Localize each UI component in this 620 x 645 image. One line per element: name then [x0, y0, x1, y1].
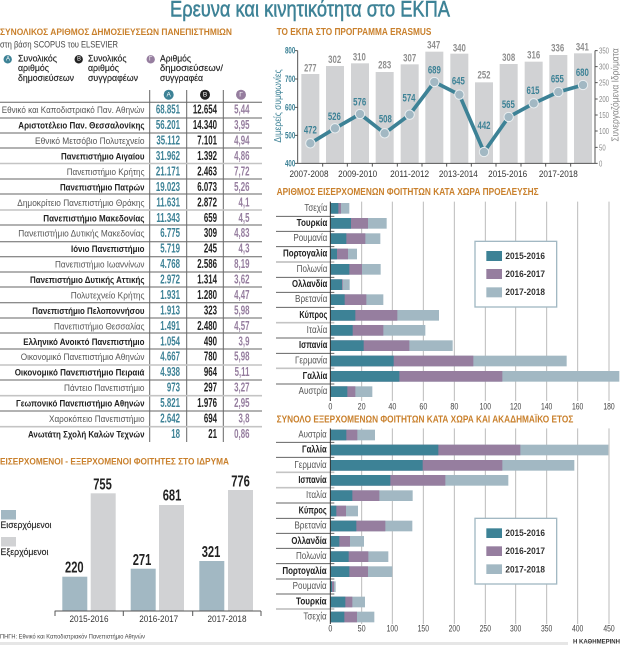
bar values: 321 [202, 543, 221, 561]
right axis labels [599, 46, 609, 168]
country labels: Τουρκία [297, 218, 327, 229]
country labels: Πολωνία [296, 551, 327, 562]
university names: Πάντειο Πανεπιστήμιο [64, 383, 144, 394]
stacked bars [330, 430, 608, 622]
agreements values: 689 [428, 65, 441, 77]
x axis values: 140 [541, 402, 552, 412]
country labels: Γαλλία [303, 371, 327, 382]
bar values: 776 [231, 473, 250, 490]
column C values: 4,47 [234, 289, 250, 303]
agreements line [310, 82, 583, 152]
x axis values: 250 [480, 624, 491, 634]
university names: Χαροκόπειο Πανεπιστήμιο [49, 414, 144, 425]
column B values: 7.101 [197, 135, 217, 148]
university names: Πανεπιστήμιο Πελοποννήσου [32, 306, 145, 317]
column C values: 4,94 [234, 135, 250, 148]
institutions values: 336 [551, 43, 564, 55]
x axis: 2016-2017 [139, 614, 178, 625]
x axis labels: 2009-2010 [338, 169, 377, 179]
country labels: Ρουμανία [293, 581, 327, 592]
footer band [0, 642, 568, 645]
institutions values: 341 [576, 41, 589, 53]
column A values: 35.112 [156, 135, 180, 148]
column A values: 18 [171, 428, 180, 442]
agreements values: 574 [402, 93, 416, 105]
bar values: 681 [163, 487, 182, 504]
column C values: 3,9 [239, 336, 250, 349]
legend: 2015-2016 [505, 528, 545, 538]
university names: Αριστοτέλειο Παν. Θεσσαλονίκης [18, 121, 145, 132]
column B values: 12.654 [193, 104, 217, 117]
country labels: Ισπανία [299, 340, 327, 351]
left axis labels: 600 [285, 102, 295, 112]
x axis labels: 2013-2014 [439, 169, 478, 179]
university names: Πανεπιστήμιο Πατρών [60, 182, 144, 193]
country labels: Τσεχία [303, 611, 327, 622]
heading: ΕΙΣΕΡΧΟΜΕΝΟΙ - ΕΞΕΡΧΟΜΕΝΟΙ ΦΟΙΤΗΤΕΣ ΣΤΟ ΙΔΡΥΜΑ [0, 456, 229, 468]
column B values: 2.872 [197, 197, 217, 210]
institutions values: 347 [427, 40, 440, 52]
column B values: 780 [204, 351, 217, 364]
x axis values: 160 [572, 402, 583, 412]
column B values: 6.073 [197, 181, 217, 194]
x axis values: 80 [450, 402, 458, 412]
heading: ΣΥΝΟΛΟ ΕΞΕΡΧΟΜΕΝΩΝ ΦΟΙΤΗΤΩΝ ΚΑΤΑ ΧΩΡΑ ΚΑΙ ΑΚΑΔΗΜΑΪΚΟ ΕΤΟΣ [277, 414, 573, 425]
country labels: Πορτογαλία [282, 566, 327, 577]
legend: column B: Συνολικός [88, 54, 127, 64]
right axis labels: 100 [599, 126, 609, 136]
legend [0, 510, 52, 558]
legend: 2017-2018 [505, 287, 545, 297]
legend: column A: Συνολικός [18, 54, 57, 64]
university names: Ανωτάτη Σχολή Καλών Τεχνών [28, 430, 144, 440]
agreements values: 526 [328, 111, 341, 123]
panel: Erasmus chart [273, 27, 620, 179]
institutions values: 316 [527, 49, 540, 61]
row separators [276, 216, 334, 384]
column B values: 2.480 [197, 320, 217, 333]
country labels: Βρετανία [294, 520, 327, 531]
column A values: 4.667 [160, 351, 180, 364]
legend: column C [146, 54, 223, 84]
university names: Δημοκρίτειο Πανεπιστήμιο Θράκης [17, 198, 145, 209]
column header badges: Β [203, 92, 207, 98]
table subheading: στη βάση SCOPUS του ELSEVIER [0, 40, 118, 50]
column B values: 490 [204, 336, 217, 349]
column A values: 56.201 [156, 120, 180, 133]
source note: ΠΗΓΗ: Εθνικό και Καποδιστριακόν Πανεπιστήμιο Αθηνών [0, 632, 145, 640]
legend: column B [74, 54, 138, 84]
country labels: Ισπανία [298, 475, 327, 486]
legend: 2016-2017 [505, 546, 545, 556]
agreements values: 508 [379, 113, 392, 125]
heading: ΤΟ ΕΚΠΑ ΣΤΟ ΠΡΟΓΡΑΜΜΑ ERASMUS [277, 27, 432, 38]
column C values: 3,95 [234, 120, 250, 133]
x axis values: 60 [419, 402, 427, 412]
institutions bars [301, 52, 592, 163]
column C values [234, 104, 250, 442]
university names: Πανεπιστήμιο Κρήτης [67, 167, 145, 178]
x axis labels: 2017-2018 [539, 169, 578, 179]
column A values: 973 [167, 382, 180, 395]
legend: column C: Αριθμός [160, 54, 191, 64]
column C values: 5,98 [234, 305, 250, 318]
x axis values: 350 [541, 624, 552, 634]
institutions values: 340 [453, 42, 466, 54]
country labels: Ολλανδία [292, 279, 327, 290]
column header badges: Γ [239, 92, 243, 98]
column A values: 4.768 [160, 259, 180, 272]
agreements values: 472 [304, 125, 317, 137]
institutions values: 277 [304, 62, 317, 74]
agreements values: 645 [452, 75, 465, 87]
legend: column B: αριθμός [88, 63, 119, 74]
column A values: 68.851 [156, 104, 180, 117]
column A values: 1.054 [160, 336, 180, 349]
x axis: 2017-2018 [208, 614, 246, 625]
left axis labels: 800 [285, 46, 295, 56]
column C values: 3,8 [239, 413, 250, 426]
x axis labels [289, 169, 578, 179]
bar values: 755 [93, 476, 112, 493]
column B values: 659 [204, 212, 217, 225]
left axis title: Διμερείς συμφωνίες [273, 69, 284, 143]
legend: 2016-2017 [505, 269, 545, 279]
column A values: 1.931 [160, 289, 180, 303]
panel: incoming and outgoing students [0, 456, 261, 640]
column C values: 4,83 [234, 228, 250, 241]
column C values: 0,86 [234, 428, 250, 442]
x axis values: 20 [358, 402, 366, 412]
legend: Εξερχόμενοι [0, 547, 48, 558]
column C values: 8,19 [234, 259, 250, 272]
column C values: 4,86 [234, 150, 250, 164]
legend: 2015-2016 [505, 251, 545, 261]
university names: Ελληνικό Ανοικτό Πανεπιστήμιο [23, 337, 145, 348]
column A values: 5.719 [160, 243, 180, 256]
agreements values [304, 65, 589, 137]
agreements values: 565 [502, 99, 515, 111]
column B values: 694 [204, 413, 217, 426]
university names: Πανεπιστήμιο Μακεδονίας [43, 213, 145, 224]
line markers [306, 77, 588, 157]
x axis values: 50 [358, 624, 366, 634]
right axis labels: 250 [599, 78, 609, 88]
heading: ΑΡΙΘΜΟΣ ΕΙΣΕΡΧΟΜΕΝΩΝ ΦΟΙΤΗΤΩΝ ΚΑΤΑ ΧΩΡΑ ΠΡΟΕΛΕΥΣΗΣ [277, 187, 539, 198]
column B values: 1.976 [197, 398, 217, 411]
x axis values: 100 [387, 624, 398, 634]
country labels: Γερμανία [294, 460, 327, 471]
right axis labels: 50 [599, 142, 606, 152]
legend [475, 518, 557, 584]
right axis labels: 150 [599, 110, 609, 120]
legend: 2017-2018 [505, 564, 545, 574]
column A values [156, 104, 180, 442]
column A values: 1.491 [160, 320, 180, 333]
column A values: 6.775 [160, 228, 180, 241]
x axis values: 400 [572, 624, 583, 634]
column C values: 3,62 [234, 274, 250, 287]
column B values: 245 [204, 243, 217, 256]
legend: column C: Γ [149, 56, 153, 62]
column C values: 4,1 [239, 197, 250, 210]
x axis values: 180 [603, 402, 615, 412]
right axis labels: 200 [599, 94, 609, 104]
column A values: 2.642 [160, 413, 180, 426]
left axis labels [285, 46, 295, 168]
axes [295, 51, 598, 167]
left axis labels: 500 [285, 130, 295, 140]
bar values: 271 [133, 551, 152, 569]
right axis labels: 300 [599, 62, 609, 72]
column A values: 21.171 [156, 166, 180, 179]
bar values [65, 473, 250, 576]
legend: column A [4, 54, 74, 84]
university names: Οικονομικό Πανεπιστήμιο Πειραιά [15, 368, 145, 379]
column A values: 11.631 [156, 197, 180, 210]
x axis: 2015-2016 [70, 614, 108, 625]
column C values: 3,27 [234, 382, 250, 395]
agreements values: 680 [576, 67, 589, 79]
column B values: 1.280 [197, 289, 217, 303]
left axis labels: 700 [285, 74, 295, 84]
column C values: 4,5 [239, 212, 250, 225]
university names: Εθνικό Μετσόβιο Πολυτεχνείο [35, 136, 144, 147]
column C values: 2,95 [234, 398, 250, 411]
column A values: 4.938 [160, 367, 180, 380]
column C values: 5,44 [234, 104, 250, 117]
country labels: Ιταλία [306, 490, 327, 501]
university names: Πανεπιστήμιο Θεσσαλίας [54, 321, 145, 332]
column C values: 7,72 [234, 166, 250, 179]
country labels: Ρουμανία [293, 233, 328, 244]
university names: Ιόνιο Πανεπιστήμιο [71, 244, 145, 255]
column B values [193, 104, 217, 442]
column C values: 5,98 [234, 351, 250, 364]
column B values: 964 [204, 367, 217, 380]
country labels: Πολωνία [297, 264, 328, 275]
column B values: 1.392 [197, 150, 217, 164]
column C values: 5,26 [234, 181, 250, 194]
x axis values [328, 624, 615, 634]
x axis values: 150 [418, 624, 429, 634]
column A values: 1.913 [160, 305, 180, 318]
institutions values: 302 [328, 54, 341, 66]
x axis labels: 2007-2008 [289, 169, 328, 179]
country labels: Αυστρία [298, 429, 327, 440]
institutions values: 310 [353, 52, 366, 64]
country labels: Ολλανδία [291, 536, 327, 547]
x axis values: 450 [603, 624, 615, 634]
column B values: 14.340 [193, 120, 217, 133]
column C values: 5,11 [235, 367, 250, 380]
institutions values [304, 40, 589, 82]
country labels [282, 429, 327, 622]
country labels: Τουρκία [296, 596, 327, 607]
column C values: 4,57 [234, 320, 250, 333]
table heading: ΣΥΝΟΛΙΚΟΣ ΑΡΙΘΜΟΣ ΔΗΜΟΣΙΕΥΣΕΩΝ ΠΑΝΕΠΙΣΤΗΜΙΩΝ [0, 27, 232, 38]
university names: Πανεπιστήμιο Δυτικής Αττικής [30, 275, 144, 286]
legend: column A: Α [6, 56, 10, 62]
university names: Πανεπιστήμιο Δυτικής Μακεδονίας [18, 229, 145, 240]
panel: publications table [0, 27, 262, 442]
column B values: 2.586 [197, 259, 217, 272]
country labels: Πορτογαλία [283, 248, 327, 259]
column A values: 19.023 [156, 181, 180, 194]
panel: incoming students by country [276, 187, 619, 412]
country labels: Γαλλία [302, 444, 327, 455]
x axis values: 40 [388, 402, 396, 412]
column A values: 2.972 [160, 274, 180, 287]
institutions values: 283 [378, 60, 391, 72]
x axis [55, 611, 261, 625]
right axis labels: 350 [599, 46, 609, 56]
university names: Εθνικό και Καποδιστριακό Παν. Αθηνών [2, 105, 145, 116]
x axis values: 300 [510, 624, 521, 634]
bar values: 220 [65, 559, 84, 576]
legend: column C: δημοσιεύσεων/ [160, 63, 223, 74]
x axis values: 200 [449, 624, 460, 634]
agreements values: 576 [353, 97, 366, 109]
column header badges [164, 90, 246, 100]
column A values: 31.962 [156, 150, 180, 164]
column A values: 5.821 [160, 398, 180, 411]
legend: column C: συγγραφέα [160, 73, 203, 84]
university names: Γεωπονικό Πανεπιστήμιο Αθηνών [16, 399, 144, 410]
country labels: Τσεχία [304, 203, 328, 214]
legend: Εισερχόμενοι [0, 520, 52, 531]
legend: column B: Β [77, 56, 81, 62]
agreements values: 442 [477, 120, 491, 132]
university names: Πολυτεχνείο Κρήτης [71, 290, 145, 302]
right axis labels: 0 [599, 158, 602, 168]
country labels: Αυστρία [299, 386, 328, 397]
panel: outgoing students by country [276, 414, 615, 634]
university names [2, 105, 145, 440]
x axis values: 0 [328, 624, 332, 634]
country labels: Ιταλία [307, 325, 328, 336]
agreements values: 655 [551, 74, 564, 86]
column header badges: Α [167, 92, 172, 98]
stacked bars [330, 203, 619, 397]
country labels: Κύπρος [299, 505, 327, 516]
x axis values [328, 402, 615, 412]
institutions values: 308 [502, 52, 515, 64]
bars [62, 490, 253, 611]
agreements values: 615 [526, 85, 540, 97]
institutions values: 307 [403, 53, 416, 65]
legend [475, 241, 557, 307]
university names: Πανεπιστήμιο Αιγαίου [61, 152, 145, 162]
x axis labels: 2011-2012 [390, 169, 429, 179]
country labels: Βρετανία [295, 294, 328, 305]
country labels [283, 203, 328, 397]
legend: column A: αριθμός [18, 63, 49, 74]
column A values: 11.343 [156, 212, 180, 225]
x axis labels: 2015-2016 [488, 169, 527, 179]
country labels: Κύπρος [299, 310, 327, 321]
left axis labels: 400 [285, 158, 295, 168]
column B values: 323 [204, 305, 217, 318]
row separators [276, 442, 334, 594]
x axis values: 0 [328, 402, 332, 412]
column B values: 1.314 [197, 274, 217, 287]
x axis values: 120 [510, 402, 521, 412]
column B values: 309 [204, 228, 217, 241]
institutions values: 252 [477, 70, 491, 82]
x axis values: 100 [480, 402, 491, 412]
column B values: 21 [208, 428, 217, 442]
country labels: Γερμανία [295, 355, 328, 366]
legend: column A: δημοσιεύσεων [18, 73, 74, 84]
university names: Οικονομικό Πανεπιστήμιο Αθηνών [21, 352, 145, 363]
column C values: 4,3 [239, 243, 250, 256]
legend: column B: συγγραφέων [88, 73, 138, 84]
column B values: 2.463 [197, 166, 217, 179]
university names: Πανεπιστήμιο Ιωαννίνων [55, 260, 145, 271]
column B values: 297 [204, 382, 217, 395]
